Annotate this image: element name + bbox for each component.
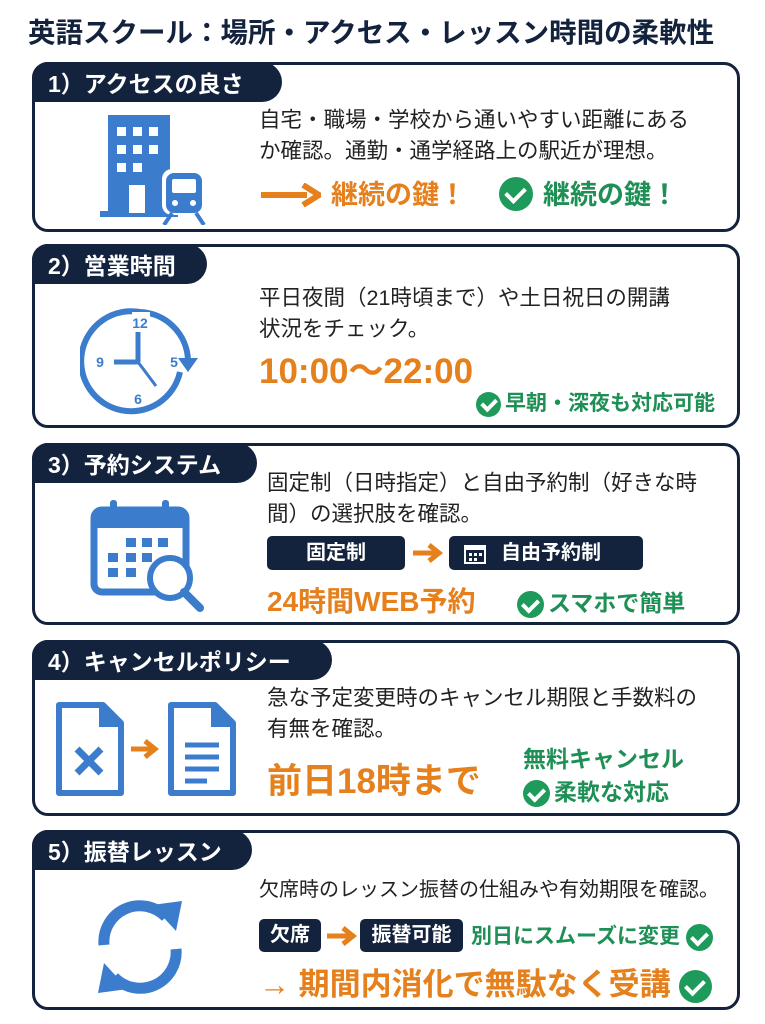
title: 英語スクール：場所・アクセス・レッスン時間の柔軟性 bbox=[28, 17, 714, 48]
tab heading 1 bbox=[32, 62, 282, 102]
panel: booking bbox=[32, 443, 740, 625]
panel: makeup lessons bbox=[32, 830, 740, 1010]
tab heading 3: 3）予約システム bbox=[48, 452, 221, 478]
flow: absence to makeup bbox=[259, 919, 713, 952]
tab heading 4 bbox=[32, 640, 332, 680]
key line: 継続の鍵！ bbox=[543, 180, 678, 210]
description 4: 有無を確認。 bbox=[267, 717, 396, 741]
description 2 bbox=[259, 286, 670, 341]
check: early/late: 早朝・深夜も対応可能 bbox=[505, 392, 715, 415]
flow: fixed to free: 固定制 bbox=[306, 542, 366, 564]
panel: hours bbox=[32, 244, 740, 428]
key line bbox=[261, 177, 678, 211]
deadline: 前日18時まで bbox=[267, 762, 481, 801]
icon: calendar search bbox=[90, 500, 204, 612]
description 3: 間）の選択肢を確認。 bbox=[267, 502, 482, 526]
tab heading 2: 2）営業時間 bbox=[48, 253, 176, 279]
description 3: 固定制（日時指定）と自由予約制（好きな時 bbox=[267, 471, 697, 495]
icon: clock: 5 bbox=[170, 354, 178, 370]
icon: clock: 6 bbox=[134, 391, 142, 407]
description 1: か確認。通勤・通学経路上の駅近が理想。 bbox=[259, 139, 668, 163]
icon: clock: 12 bbox=[132, 315, 148, 331]
arrow bbox=[261, 183, 321, 207]
flow: absence to makeup: 別日にスムーズに変更 bbox=[471, 925, 680, 948]
final line: → 期間内消化で無駄なく受講 bbox=[259, 967, 671, 1002]
description 4 bbox=[267, 686, 697, 741]
tab heading 4: 4）キャンセルポリシー bbox=[48, 649, 291, 675]
tab heading 5 bbox=[32, 830, 252, 870]
icon: documents bbox=[56, 702, 236, 796]
flow: absence to makeup: 振替可能 bbox=[372, 924, 452, 946]
tab heading 3 bbox=[32, 443, 257, 483]
panel: cancel policy bbox=[32, 640, 740, 816]
description 4: 急な予定変更時のキャンセル期限と手数料の bbox=[267, 686, 697, 710]
tab heading 2 bbox=[32, 244, 207, 284]
key line: 継続の鍵！ bbox=[331, 180, 466, 210]
icon: sync arrows bbox=[98, 900, 182, 994]
flow: fixed to free bbox=[267, 536, 643, 570]
icon: clock: 9 bbox=[96, 354, 104, 370]
flow: fixed to free: 自由予約制 bbox=[501, 542, 601, 564]
tab heading 5: 5）振替レッスン bbox=[48, 839, 222, 865]
free cancel bbox=[523, 746, 684, 807]
24h booking: 24時間WEB予約 bbox=[267, 586, 475, 617]
icon: clock bbox=[80, 308, 198, 414]
free cancel: 柔軟な対応 bbox=[554, 779, 669, 805]
description 1 bbox=[259, 108, 689, 163]
description 2: 平日夜間（21時頃まで）や土日祝日の開講 bbox=[259, 286, 670, 310]
free cancel: 無料キャンセル bbox=[523, 746, 684, 772]
description 3 bbox=[267, 471, 697, 526]
flow: absence to makeup: 欠席 bbox=[270, 924, 310, 946]
hours: 10:00〜22:00 bbox=[259, 352, 473, 391]
description 5: 欠席時のレッスン振替の仕組みや有効期限を確認。 bbox=[259, 879, 719, 901]
panel: access bbox=[32, 62, 740, 232]
description 2: 状況をチェック。 bbox=[259, 317, 429, 341]
check: smartphone: スマホで簡単 bbox=[548, 590, 685, 616]
tab heading 1: 1）アクセスの良さ bbox=[48, 71, 244, 97]
description 1: 自宅・職場・学校から通いやすい距離にある bbox=[259, 108, 689, 132]
icon: building and train bbox=[100, 115, 206, 225]
